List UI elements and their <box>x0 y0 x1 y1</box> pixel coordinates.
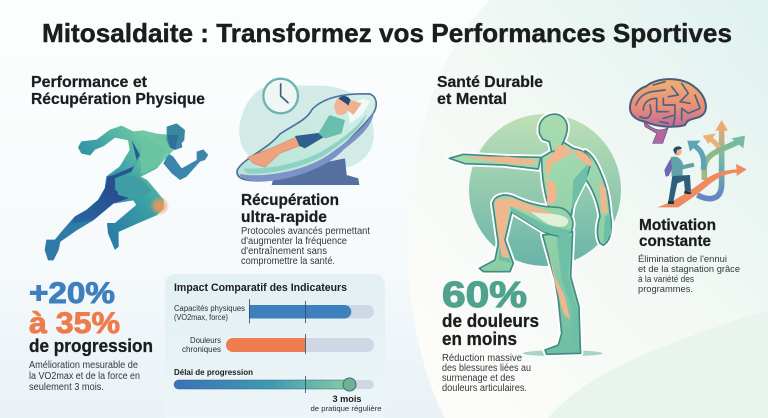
stat: progression: +20% <box>29 277 115 310</box>
stat: pain reduction: en moins <box>442 329 517 349</box>
bar: physical capacities: Capacités physiques <box>174 304 245 313</box>
heading: recovery: ultra-rapide <box>241 209 327 226</box>
progress bar: delay: Délai de progression <box>174 367 253 377</box>
text: recovery description: d'entraînement sans <box>241 246 327 257</box>
text: recovery description: Protocoles avancés permettant <box>241 226 370 237</box>
text: motivation description: Élimination de l'ennui <box>638 254 727 265</box>
heading: motivation: Motivation <box>639 217 716 234</box>
heading: recovery <box>241 192 339 226</box>
bar: chronic pain: chroniques <box>182 345 221 354</box>
text: recovery description <box>241 226 370 267</box>
bar: physical capacities <box>174 299 374 324</box>
stat: pain reduction: de douleurs <box>442 311 539 331</box>
icon: recovery chair and clock <box>237 79 376 185</box>
text: pain description: Réduction massive <box>442 353 523 364</box>
icon: runner <box>45 123 208 260</box>
text: progression description <box>29 360 140 393</box>
text: motivation description <box>638 254 740 295</box>
heading: motivation <box>639 217 716 250</box>
stat: progression: de progression <box>29 336 153 356</box>
text: pain description: surmenage et des <box>442 373 515 384</box>
text: pain description: douleurs articulaires. <box>442 383 527 394</box>
heading: performance: Performance et <box>31 74 148 91</box>
heading: health: Santé Durable <box>437 74 543 91</box>
heading: motivation: constante <box>639 233 711 250</box>
heading: health <box>437 74 543 108</box>
text: recovery description: compromettre la santé. <box>241 256 335 267</box>
text: motivation description: programmes. <box>638 284 693 295</box>
bar: physical capacities: (VO2max, force) <box>174 313 228 322</box>
bar: chronic pain: Douleurs <box>190 336 221 345</box>
progress bar: delay: de pratique régulière <box>310 404 382 413</box>
text: progression description: Amélioration mesurable de <box>29 360 139 371</box>
stat: pain reduction <box>442 274 539 349</box>
progress bar: delay <box>174 367 382 413</box>
text: pain description: des blessures liées au <box>442 363 531 374</box>
heading: recovery: Récupération <box>241 192 339 209</box>
heading: performance <box>31 74 205 108</box>
text: progression description: la VO2max et de la force en <box>29 371 140 382</box>
text: pain description <box>442 353 531 394</box>
stat: progression: à 35% <box>29 307 120 340</box>
icon: standing athlete <box>449 114 621 356</box>
icon: person on branching arrows <box>657 120 747 207</box>
text: motivation description: et de la stagnation grâce <box>638 264 740 275</box>
text: recovery description: d'augmenter la fréquence <box>241 236 348 247</box>
panel: comparative impact <box>165 274 385 418</box>
progress bar: delay: 3 mois <box>332 394 362 405</box>
text: motivation description: à la variété des <box>638 274 694 285</box>
stat: pain reduction: 60% <box>442 274 527 315</box>
stat: progression <box>29 277 153 356</box>
heading: performance: Récupération Physique <box>31 91 205 108</box>
heading: health: et Mental <box>437 91 507 108</box>
icon: brain <box>630 79 706 143</box>
bar: chronic pain <box>182 334 374 354</box>
title: Mitosaldaite : Transformez vos Performances Sportives <box>42 18 732 48</box>
text: progression description: seulement 3 mois. <box>29 382 104 393</box>
panel heading: Impact Comparatif des Indicateurs <box>174 282 347 294</box>
